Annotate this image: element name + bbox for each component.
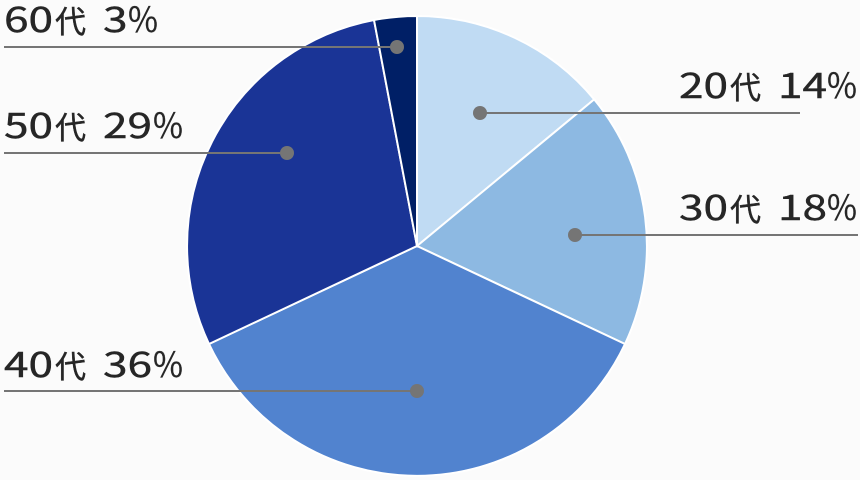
label: 20s 14%: 14: [778, 59, 827, 108]
label: 30s 18%: 18: [778, 181, 827, 230]
label: 30s 18%: 代: [730, 185, 761, 230]
label: 60s 3%: [4, 0, 404, 54]
label: 20s 14%: [473, 58, 857, 120]
label: 40s 36%: 36: [103, 338, 152, 387]
label: 50s 29%: [4, 98, 294, 160]
slice: 60s 3%: [374, 16, 417, 246]
label: 40s 36%: [4, 337, 424, 398]
pie chart: [187, 16, 647, 476]
label: 20s 14%: 代: [730, 63, 761, 108]
label: 40s 36%: 代: [55, 342, 86, 387]
slice: 30s 18%: [417, 99, 647, 344]
label: 30s 18%: %: [827, 180, 857, 230]
label: 40s 36%: %: [153, 337, 183, 387]
label: 50s 29%: 代: [55, 103, 86, 148]
slice: 50s 29%: [187, 20, 417, 344]
label: 50s 29%: 29: [103, 99, 152, 148]
label: 30s 18%: [568, 180, 858, 242]
label: 50s 29%: 50: [4, 99, 53, 148]
slice: 20s 14%: [417, 16, 594, 246]
label: 50s 29%: %: [153, 98, 183, 148]
label: 20s 14%: 20: [679, 59, 728, 108]
label: 20s 14%: %: [827, 58, 857, 108]
label: 40s 36%: 40: [4, 338, 53, 387]
slice: 40s 36%: [209, 246, 625, 476]
label: 30s 18%: 30: [679, 181, 728, 230]
